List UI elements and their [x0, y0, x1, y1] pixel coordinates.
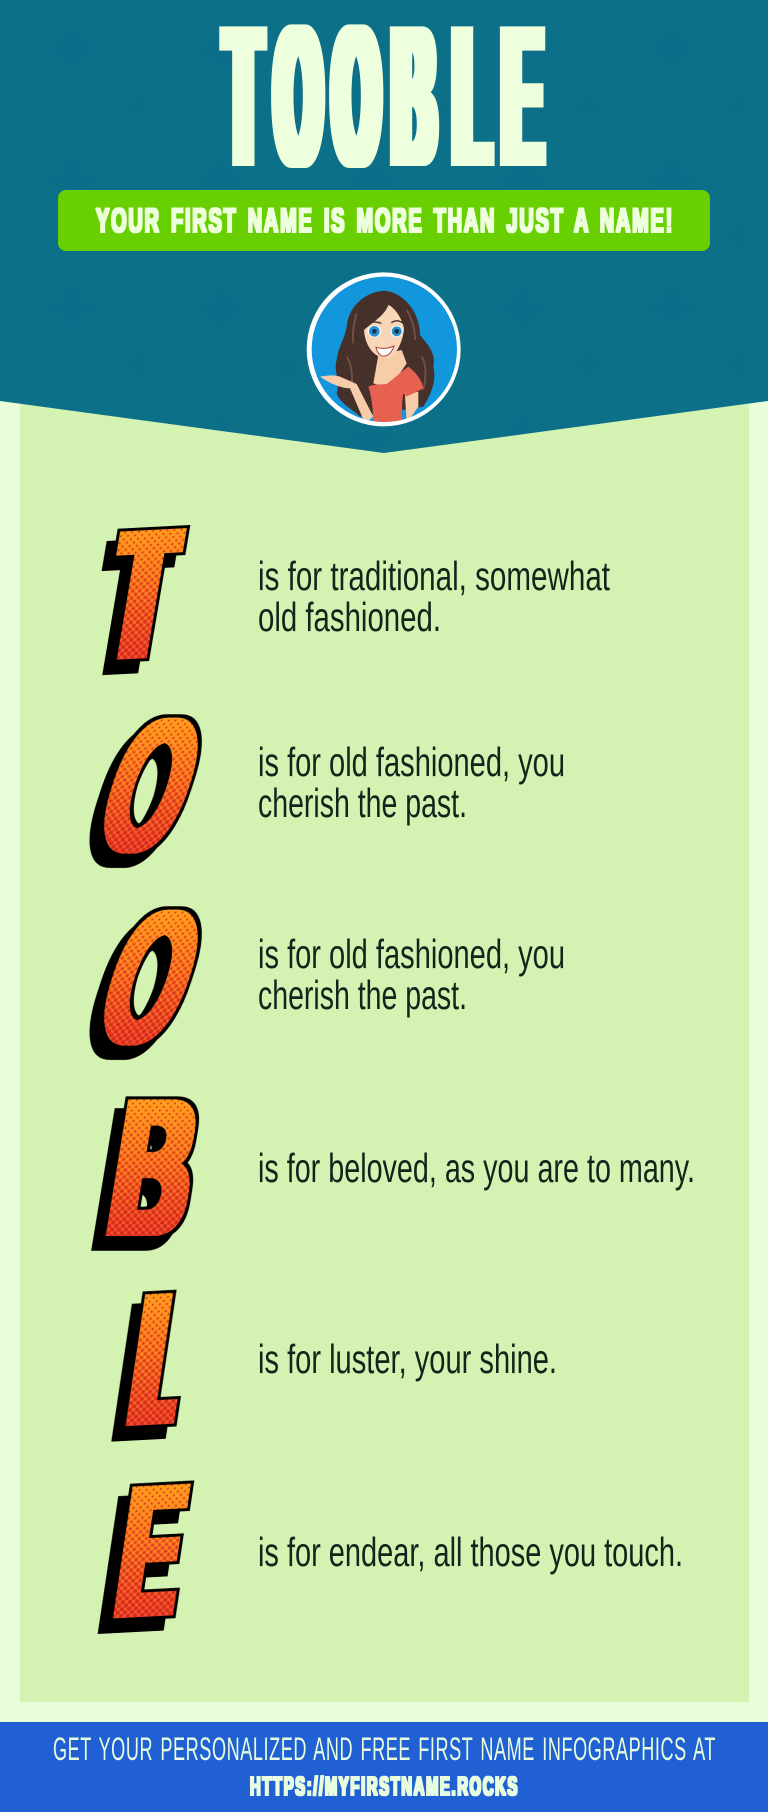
text block: O: is for old fashioned, you: [258, 931, 565, 977]
text block: T: old fashioned.: [258, 594, 441, 640]
text block: O: [258, 739, 565, 826]
text block: T: is for traditional, somewhat: [258, 553, 610, 599]
letter T: [102, 524, 190, 676]
footer: [0, 1722, 768, 1812]
letter O: O: [78, 682, 223, 891]
content panel: [20, 380, 749, 1702]
icon: avatar of smiling woman: [307, 272, 461, 426]
letter O: [89, 906, 202, 1060]
header banner: [0, 0, 768, 453]
text block: L: is for luster, your shine.: [258, 1336, 557, 1382]
text block: O: is for old fashioned, you: [258, 739, 565, 785]
letter O: [89, 714, 202, 868]
letter L: L: [126, 1254, 191, 1464]
letter B: B: [98, 1062, 209, 1273]
footer: HTTPS://MYFIRSTNAME.ROCKS: [250, 1771, 519, 1801]
letter T: T: [100, 492, 185, 698]
text block: O: cherish the past.: [258, 780, 467, 826]
letter O: O: [78, 874, 223, 1083]
text block: T: [258, 553, 610, 640]
letter L: [111, 1290, 182, 1442]
subtitle bar: [58, 190, 710, 251]
text block: O: cherish the past.: [258, 972, 467, 1018]
letter B: [91, 1096, 200, 1251]
letter E: E: [108, 1446, 196, 1656]
letter E: [98, 1480, 194, 1634]
text block: O: [258, 931, 565, 1018]
